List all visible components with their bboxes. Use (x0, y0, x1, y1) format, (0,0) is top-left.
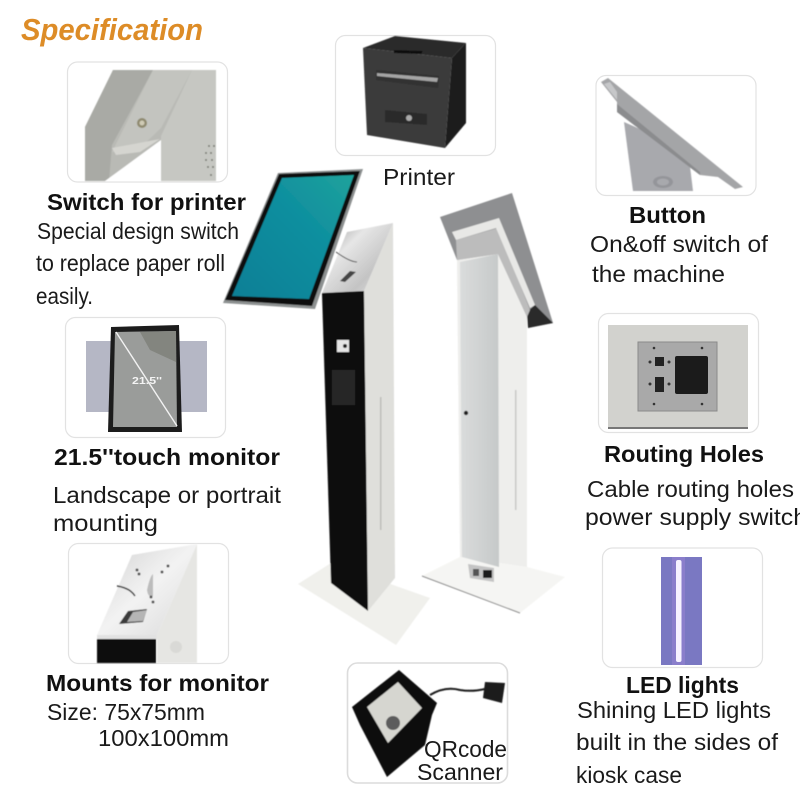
panel: touch monitor (66, 318, 226, 438)
panel: LED lights (602, 548, 762, 668)
text: button description: the machine (592, 261, 725, 287)
panel: touch monitor: 21.5'' (132, 376, 162, 387)
kiosk: rear view (422, 193, 565, 613)
heading: mounts for monitor: Mounts for monitor (46, 670, 269, 696)
text: mounting description: Landscape or portrait (53, 482, 282, 508)
text: routing description (585, 476, 800, 530)
panel: mounts for monitor (68, 544, 228, 664)
slanted top (322, 223, 393, 293)
door (460, 254, 499, 567)
port plate (468, 564, 494, 582)
text: LED description: Shining LED lights (577, 697, 771, 723)
panel: printer (336, 36, 496, 156)
base (422, 557, 565, 613)
photo: switch bracket (85, 70, 216, 181)
monitor (223, 169, 363, 309)
title: Specification (21, 12, 203, 47)
text: button description: On&off switch of (590, 231, 769, 257)
heading: touch monitor: 21.5''touch monitor (54, 444, 280, 470)
monitor back (440, 193, 553, 328)
text: mount sizes (47, 699, 229, 751)
text: routing description: Cable routing holes (587, 476, 794, 502)
label: scanner (417, 736, 507, 785)
text: mounting description (53, 482, 282, 536)
side panel (364, 223, 395, 611)
kiosk: front view (223, 169, 430, 645)
base (298, 563, 430, 645)
column (457, 254, 527, 567)
panel: switch for printer (68, 62, 228, 182)
text: LED description: kiosk case (576, 762, 682, 788)
label: scanner: Scanner (417, 759, 503, 785)
black front (322, 291, 368, 611)
text: mount sizes: 100x100mm (98, 725, 229, 751)
text: switch description (36, 218, 239, 309)
text: LED description (576, 697, 779, 788)
text: switch description: to replace paper roll (36, 250, 225, 276)
panel: QR code scanner (348, 663, 508, 785)
heading: switch for printer: Switch for printer (47, 189, 246, 215)
text: mount sizes: Size: 75x75mm (47, 699, 205, 725)
text: routing description: power supply switch (585, 504, 800, 530)
text: switch description: Special design switch (37, 218, 239, 244)
text: switch description: easily. (36, 283, 93, 309)
icon: scanner (352, 670, 505, 777)
panel: routing holes (598, 314, 758, 432)
panel: button (596, 76, 756, 196)
label: scanner: QRcode (424, 736, 507, 762)
text: LED description: built in the sides of (576, 729, 779, 755)
heading: button: Button (629, 202, 706, 228)
heading: LED lights: LED lights (626, 672, 739, 698)
label: printer: Printer (383, 164, 455, 190)
heading: routing holes: Routing Holes (604, 441, 764, 467)
text: button description (590, 231, 769, 287)
text: mounting description: mounting (53, 510, 158, 536)
